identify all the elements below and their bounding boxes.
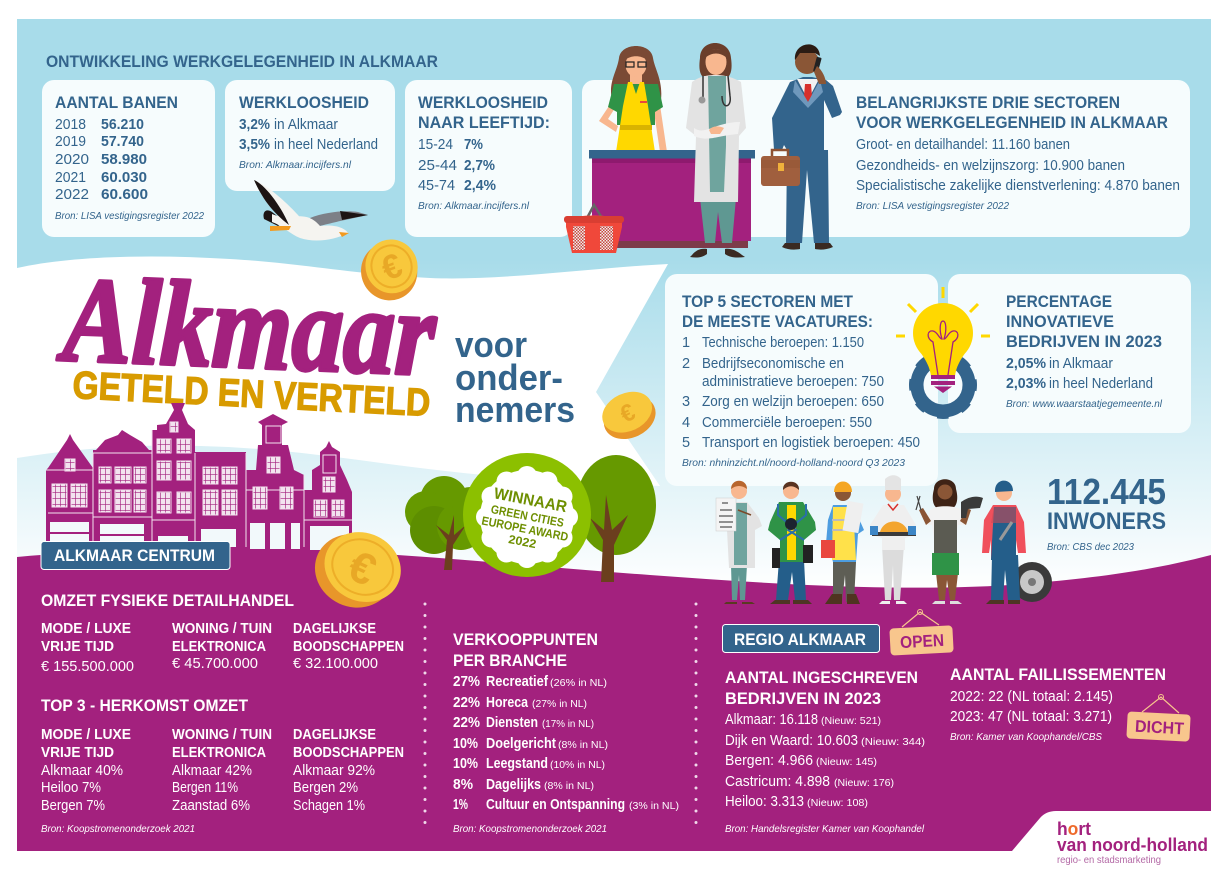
source: Bron: Kamer van Koophandel/CBS [950, 731, 1102, 743]
tag: regio alkmaar [722, 624, 880, 652]
figure: chef [870, 475, 916, 604]
tagline: voor ondernemers: onder- [455, 357, 563, 398]
figure: construction worker [821, 482, 864, 604]
column: woning tuin: WONING / TUIN [172, 621, 272, 637]
subtitle: geteld en verteld: GETELD EN VERTELD [72, 364, 431, 425]
award badge: green cities: 2022 [507, 532, 538, 551]
white banner [17, 256, 668, 486]
column: woning tuin: ELEKTRONICA [172, 745, 266, 761]
unemployment figures: in heel Nederland [274, 137, 378, 153]
column: mode luxe: MODE / LUXE [41, 727, 131, 743]
heading: ingeschreven bedrijven: AANTAL INGESCHREVEN [725, 668, 918, 687]
unemployment figures: 3,5% [239, 137, 270, 153]
illustration: businessman with phone and briefcase [761, 44, 842, 250]
illustration: coin large: € [341, 541, 383, 596]
heading: verkooppunten: PER BRANCHE [453, 651, 567, 670]
branch percentages: (8% in NL) [558, 739, 608, 751]
branch percentages: Leegstand [486, 756, 548, 772]
logo: hart van noord-holland [1057, 819, 1208, 866]
branch percentages: Dagelijks [486, 777, 541, 793]
bankruptcy figures: 2022: 22 (NL totaal: 2.145) [950, 689, 1113, 705]
sector list: Specialistische zakelijke dienstverlening: 4.870 banen [856, 178, 1180, 194]
ranked list: Zorg en welzijn beroepen: 650 [702, 394, 884, 410]
jobs by year: 60.600 [101, 187, 148, 203]
panel heading: naar leeftijd: WERKLOOSHEID [418, 93, 548, 112]
column: mode luxe: VRIJE TIJD [41, 639, 114, 655]
title: Alkmaar: Alkmaar [55, 252, 439, 402]
shop fronts [50, 426, 349, 550]
column: woning tuin [172, 621, 272, 672]
heading: verkooppunten: VERKOOPPUNTEN [453, 630, 598, 649]
logo: hart van noord-holland: regio- en stadsmarketing [1057, 854, 1161, 866]
jobs by year [55, 117, 148, 203]
section: top 3 herkomst omzet [41, 696, 404, 835]
sign: dicht: DICHT [1135, 717, 1185, 738]
branch percentages: (10% in NL) [550, 759, 605, 771]
ranked list [682, 335, 920, 451]
panel heading: innovatie: PERCENTAGE [1006, 292, 1112, 311]
panel heading: innovatie [1006, 292, 1162, 351]
panel: belangrijkste drie sectoren [582, 80, 1190, 237]
company counts: (Nieuw: 145) [816, 756, 877, 768]
award badge: green cities [463, 453, 591, 577]
column: mode luxe: MODE / LUXE [41, 621, 131, 637]
panel heading: naar leeftijd [418, 93, 550, 132]
column: dagelijkse boodschappen: Bergen 2% [293, 780, 358, 796]
branch percentages: 1% [453, 797, 468, 813]
award badge: green cities: EUROPE AWARD [480, 514, 570, 544]
figure: mechanic [982, 481, 1052, 604]
jobs by year: 2019 [55, 134, 86, 150]
column: woning tuin: Zaanstad 6% [172, 798, 250, 814]
award badge: green cities: GREEN CITIES [490, 502, 565, 530]
panel heading: innovatie: INNOVATIEVE [1006, 312, 1114, 331]
column: dagelijkse boodschappen: Alkmaar 92% [293, 763, 375, 779]
branch percentages: Horeca [486, 695, 529, 711]
section: aantal ingeschreven bedrijven [725, 668, 925, 835]
company counts: (Nieuw: 344) [861, 736, 925, 748]
branch percentages: (26% in NL) [550, 677, 607, 689]
tire [1012, 562, 1052, 602]
source: Bron: Alkmaar.incijfers.nl [418, 200, 530, 212]
panel: percentage innovatieve bedrijven [948, 274, 1191, 433]
branch percentages: 8% [453, 777, 473, 793]
tag: alkmaar centrum: ALKMAAR CENTRUM [54, 546, 215, 565]
branch percentages: (8% in NL) [544, 780, 594, 792]
panel heading: sectoren: VOOR WERKGELEGENHEID IN ALKMAAR [856, 113, 1168, 132]
shopping basket [564, 205, 624, 253]
branch percentages: Diensten [486, 715, 538, 731]
ranked list: 4 [682, 415, 690, 431]
innovation figures: in Alkmaar [1049, 356, 1113, 372]
shopkeeper [599, 46, 667, 152]
branch percentages: (3% in NL) [629, 800, 679, 812]
column: dagelijkse boodschappen [293, 727, 404, 814]
heading: verkooppunten [453, 630, 598, 670]
ranked list: Bedrijfseconomische en [702, 356, 844, 372]
inwoners count [1047, 471, 1166, 553]
section: verkooppunten per branche [453, 630, 679, 835]
unemployment by age: 7% [464, 137, 483, 153]
column: dagelijkse boodschappen: Schagen 1% [293, 798, 365, 814]
company counts: (Nieuw: 108) [807, 797, 868, 809]
branch percentages: (17% in NL) [542, 718, 594, 730]
heading: faillissementen: AANTAL FAILLISSEMENTEN [950, 665, 1166, 684]
panel heading: aantal banen: AANTAL BANEN [55, 93, 178, 112]
column: mode luxe [41, 621, 134, 675]
illustration: tree right [576, 455, 656, 582]
branch percentages [453, 674, 679, 813]
jobs by year: 2018 [55, 117, 86, 133]
company counts: (Nieuw: 521) [821, 715, 881, 727]
illustration: coin large [303, 517, 412, 622]
unemployment figures [239, 117, 378, 153]
ranked list: 5 [682, 435, 690, 451]
illustration: canal houses [46, 403, 352, 552]
figure: hairdresser [916, 479, 983, 604]
column: dagelijkse boodschappen: € 32.100.000 [293, 656, 378, 672]
ranked list: Technische beroepen: 1.150 [702, 335, 864, 351]
branch percentages: 27% [453, 674, 480, 690]
unemployment by age: 2,4% [464, 178, 496, 194]
source: Bron: nhninzicht.nl/noord-holland-noord Q3 2023 [682, 457, 905, 469]
jobs by year: 2021 [55, 170, 86, 186]
column: dagelijkse boodschappen: DAGELIJKSE [293, 727, 376, 743]
jobs by year: 2020 [55, 152, 89, 168]
unemployment by age: 45-74 [418, 178, 455, 194]
tag: alkmaar centrum [41, 542, 230, 570]
figure: optician [716, 481, 762, 604]
jobs by year: 56.210 [101, 117, 144, 133]
branch percentages: 10% [453, 756, 478, 772]
illustration: tree left [405, 476, 488, 570]
branch percentages: 22% [453, 715, 480, 731]
heading: herkomst: TOP 3 - HERKOMST OMZET [41, 696, 249, 715]
heading: ingeschreven bedrijven: BEDRIJVEN IN 2023 [725, 689, 881, 708]
unemployment by age [418, 137, 496, 194]
panel: top 5 vacatures [665, 274, 938, 486]
panel: aantal banen [42, 80, 215, 237]
column: mode luxe: Heiloo 7% [41, 780, 101, 796]
heading: omzet: OMZET FYSIEKE DETAILHANDEL [41, 591, 294, 610]
logo: hart van noord-holland: van noord-holland [1057, 835, 1208, 855]
icon: light bulb with gear [896, 287, 990, 416]
heading: ingeschreven bedrijven [725, 668, 918, 708]
tag: regio alkmaar: REGIO ALKMAAR [734, 630, 866, 649]
ranked list: Commerciële beroepen: 550 [702, 415, 872, 431]
source: Bron: LISA vestigingsregister 2022 [856, 200, 1009, 212]
branch percentages: Doelgericht [486, 736, 556, 752]
jobs by year: 60.030 [101, 170, 147, 186]
windows [52, 422, 344, 517]
column: woning tuin: ELEKTRONICA [172, 639, 266, 655]
bankruptcy figures: 2023: 47 (NL totaal: 3.271) [950, 709, 1112, 725]
panel heading: top 5: TOP 5 SECTOREN MET [682, 292, 854, 311]
source: Bron: Alkmaar.incijfers.nl [239, 159, 352, 171]
column: woning tuin: Bergen 11% [172, 780, 238, 796]
briefcase [761, 150, 800, 186]
figure: photographer [768, 482, 816, 604]
company counts [725, 712, 925, 810]
panel heading: top 5 [682, 292, 873, 331]
panel heading: naar leeftijd: NAAR LEEFTIJD: [418, 113, 550, 132]
source: Bron: Koopstromenonderzoek 2021 [41, 823, 195, 835]
ranked list: 1 [682, 335, 690, 351]
unemployment by age: 2,7% [464, 158, 495, 174]
tagline: voor ondernemers: voor [455, 324, 527, 365]
inwoners count: INWONERS [1047, 508, 1166, 535]
tagline: voor ondernemers [455, 324, 575, 430]
award badge: green cities: WINNAAR [492, 485, 569, 516]
column: woning tuin: € 45.700.000 [172, 656, 258, 672]
source: Bron: LISA vestigingsregister 2022 [55, 210, 204, 222]
unemployment by age: 15-24 [418, 137, 453, 153]
section: omzet fysieke detailhandel [41, 591, 404, 675]
illustration: seagull [254, 180, 368, 240]
unemployment figures: 3,2% [239, 117, 270, 133]
panel heading: werkloosheid: WERKLOOSHEID [239, 93, 369, 112]
counter [589, 150, 755, 248]
sign: dicht [1126, 694, 1191, 742]
branch percentages: Cultuur en Ontspanning [486, 797, 625, 813]
source: Bron: CBS dec 2023 [1047, 541, 1134, 553]
illustration: coin middle [595, 384, 663, 447]
ranked list: 2 [682, 356, 690, 372]
innovation figures: 2,03% [1006, 376, 1046, 392]
jobs by year: 57.740 [101, 134, 144, 150]
innovation figures [1006, 356, 1153, 392]
jobs by year: 2022 [55, 187, 89, 203]
branch percentages: 10% [453, 736, 478, 752]
column: mode luxe [41, 727, 131, 814]
company counts: Castricum: 4.898 [725, 774, 830, 790]
panel heading: innovatie: BEDRIJVEN IN 2023 [1006, 332, 1162, 351]
ranked list: Transport en logistiek beroepen: 450 [702, 435, 920, 451]
illustration: shop counter with shopkeeper [564, 46, 755, 253]
company counts: Dijk en Waard: 10.603 [725, 733, 858, 749]
source: Bron: Koopstromenonderzoek 2021 [453, 823, 607, 835]
inwoners count: 112.445 [1047, 471, 1166, 512]
sector list [856, 137, 1180, 194]
jobs by year: 58.980 [101, 152, 147, 168]
source: Bron: www.waarstaatjegemeente.nl [1006, 398, 1163, 410]
branch percentages: Recreatief [486, 674, 548, 690]
illustration: six professionals [716, 475, 1052, 604]
column: mode luxe: Bergen 7% [41, 798, 105, 814]
panel heading: top 5: DE MEESTE VACATURES: [682, 312, 873, 331]
sector list: Gezondheids- en welzijnszorg: 10.900 banen [856, 158, 1125, 174]
panel: werkloosheid naar leeftijd [405, 80, 572, 237]
logo: hart van noord-holland: hort [1057, 819, 1091, 839]
purple ground panel [17, 549, 1211, 851]
tagline: voor ondernemers: nemers [455, 389, 575, 430]
ranked list: administratieve beroepen: 750 [702, 374, 884, 390]
column: woning tuin [172, 727, 272, 814]
sign: open: OPEN [900, 631, 945, 652]
illustration: coin middle: € [616, 398, 640, 429]
illustration: doctor [686, 43, 746, 258]
unemployment figures: in Alkmaar [274, 117, 338, 133]
panel heading: sectoren [856, 93, 1168, 132]
bankruptcy figures [950, 689, 1113, 725]
column: dagelijkse boodschappen: DAGELIJKSE [293, 621, 376, 637]
company counts: (Nieuw: 176) [834, 777, 894, 789]
column: woning tuin: Alkmaar 42% [172, 763, 252, 779]
innovation figures: 2,05% [1006, 356, 1046, 372]
column: mode luxe: € 155.500.000 [41, 659, 134, 675]
illustration: coin top: € [376, 246, 407, 288]
source: Bron: Handelsregister Kamer van Koophandel [725, 823, 925, 835]
panel: werkloosheid [225, 80, 395, 191]
panel heading: sectoren: BELANGRIJKSTE DRIE SECTOREN [856, 93, 1120, 112]
column: dagelijkse boodschappen: BOODSCHAPPEN [293, 639, 404, 655]
column: woning tuin: WONING / TUIN [172, 727, 272, 743]
column: mode luxe: Alkmaar 40% [41, 763, 123, 779]
column: mode luxe: VRIJE TIJD [41, 745, 114, 761]
column: dagelijkse boodschappen: BOODSCHAPPEN [293, 745, 404, 761]
company counts: Bergen: 4.966 [725, 753, 813, 769]
sector list: Groot- en detailhandel: 11.160 banen [856, 137, 1070, 153]
branch percentages: 22% [453, 695, 480, 711]
column: dagelijkse boodschappen [293, 621, 404, 672]
company counts: Heiloo: 3.313 [725, 794, 804, 810]
sign: open [889, 610, 954, 656]
company counts: Alkmaar: 16.118 [725, 712, 818, 728]
ranked list: 3 [682, 394, 690, 410]
innovation figures: in heel Nederland [1049, 376, 1153, 392]
heading: ontwikkeling werkgelegenheid: ONTWIKKELING WERKGELEGENHEID IN ALKMAAR [46, 52, 438, 71]
section: aantal faillissementen [950, 665, 1166, 743]
branch percentages: (27% in NL) [532, 698, 587, 710]
illustration: coin top [352, 232, 427, 308]
unemployment by age: 25-44 [418, 158, 457, 174]
